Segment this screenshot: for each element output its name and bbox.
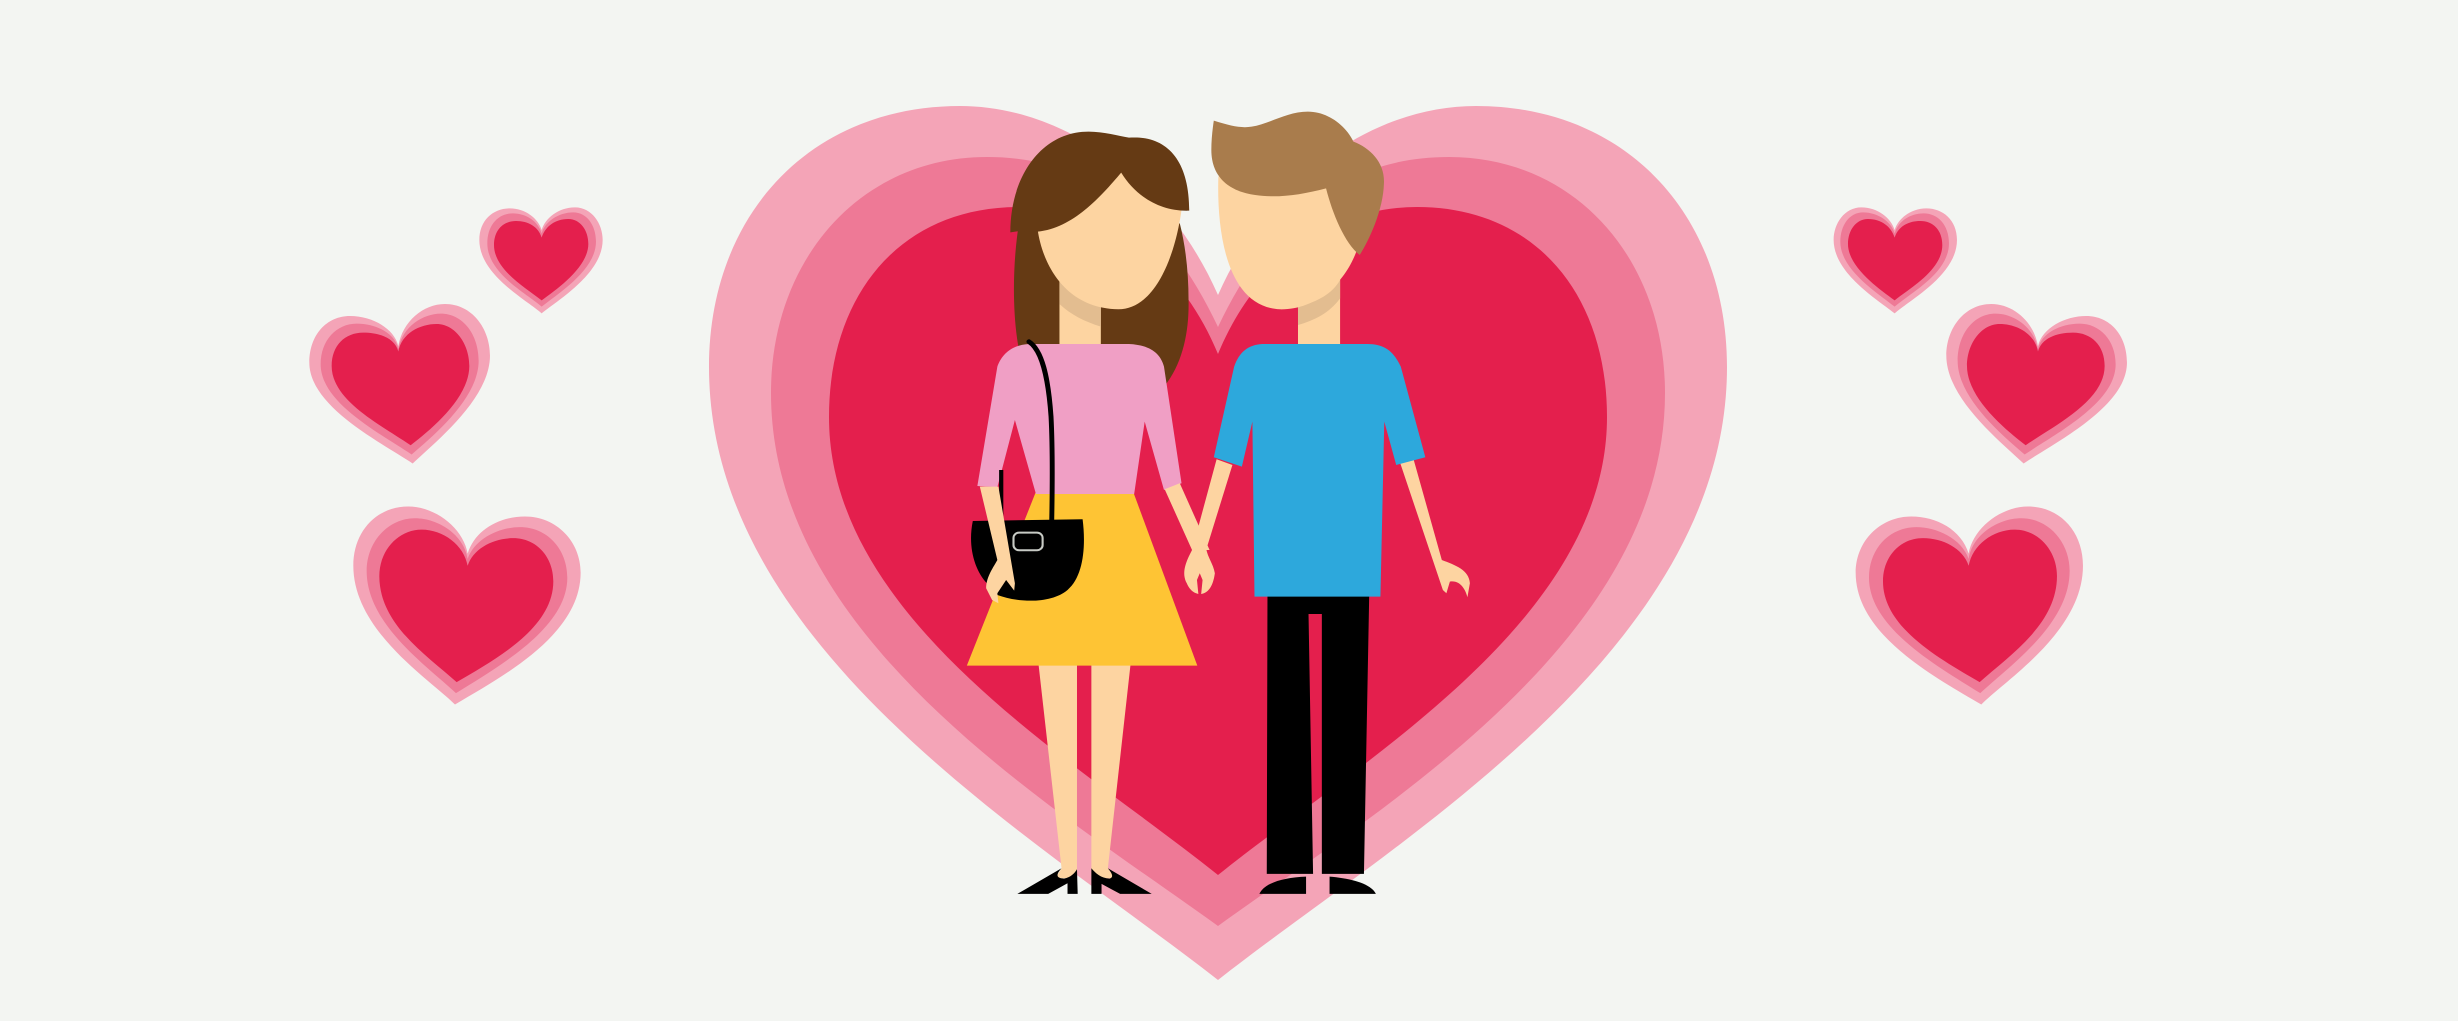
man blue t-shirt bbox=[1214, 344, 1425, 597]
woman neck shadow bbox=[1059, 280, 1101, 327]
woman left shoe bbox=[1017, 868, 1078, 894]
bag clasp bbox=[1013, 533, 1043, 550]
man hair bbox=[1211, 112, 1384, 255]
man face bbox=[1218, 167, 1357, 309]
large central layered heart bbox=[709, 106, 1727, 980]
man left shoe bbox=[1259, 877, 1306, 894]
bag body bbox=[971, 519, 1084, 601]
woman yellow skirt bbox=[967, 492, 1197, 666]
woman back hair bbox=[1014, 223, 1189, 387]
hearts on the left bbox=[309, 207, 603, 705]
small heart, left bbox=[479, 207, 603, 313]
man neck shadow bbox=[1298, 280, 1340, 325]
man right shoe bbox=[1330, 877, 1376, 894]
woman face bbox=[1038, 150, 1182, 309]
man free arm and hand bbox=[1400, 460, 1470, 597]
man figure bbox=[1211, 112, 1470, 894]
large heart, left bbox=[353, 506, 581, 705]
bag strap bbox=[1029, 342, 1052, 521]
joined hands bbox=[1165, 459, 1232, 594]
medium heart, left bbox=[309, 304, 490, 463]
woman neck bbox=[1059, 277, 1101, 347]
woman front hair bbox=[1010, 132, 1189, 232]
handbag bbox=[971, 342, 1084, 601]
hearts on the right bbox=[1834, 207, 2127, 705]
woman arm holding bag bbox=[980, 487, 1015, 603]
man trousers bbox=[1267, 595, 1369, 874]
woman legs bbox=[1038, 663, 1131, 878]
couple figures bbox=[967, 112, 1470, 894]
woman figure bbox=[967, 132, 1197, 894]
medium heart, right bbox=[1946, 304, 2127, 463]
large heart, right bbox=[1856, 506, 2083, 705]
woman right shoe bbox=[1091, 868, 1152, 894]
woman pink top bbox=[977, 344, 1182, 494]
small heart, right bbox=[1834, 207, 1957, 313]
man neck bbox=[1298, 277, 1340, 347]
